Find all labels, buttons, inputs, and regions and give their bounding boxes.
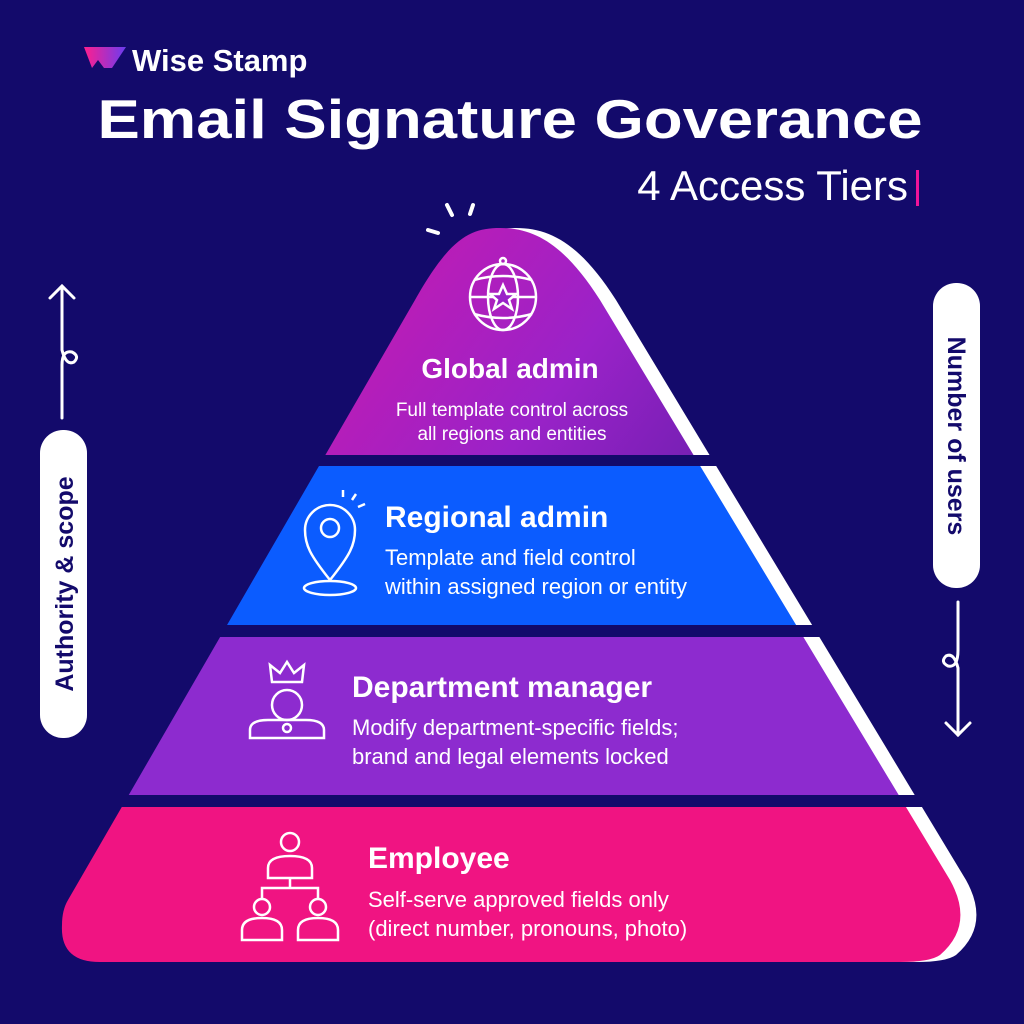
tier 1: global admin — [325, 228, 710, 455]
tier 4: employee — [62, 807, 976, 962]
arrow: down — [943, 602, 970, 735]
tier 4: employee: Self-serve approved fields only — [368, 887, 669, 912]
icon: map pin — [304, 490, 365, 595]
tier 3: department manager: brand and legal elements locked — [352, 744, 669, 769]
sparkle — [428, 205, 473, 233]
tier 3: department manager: Department manager — [352, 671, 652, 704]
icon: globe — [470, 258, 536, 330]
tier 3: department manager — [128, 637, 915, 795]
tier 1: global admin: Global admin — [421, 353, 599, 384]
tier 2: regional admin: Regional admin — [385, 501, 608, 534]
tier 4: employee: (direct number, pronouns, photo) — [368, 916, 687, 941]
icon: org chart — [242, 833, 338, 940]
tier 1: global admin: all regions and entities — [417, 424, 607, 445]
tier 3: department manager: Modify department-specific fields; — [352, 715, 678, 740]
tier 2: regional admin: Template and field control — [385, 545, 636, 570]
tier 4: employee: Employee — [368, 842, 510, 875]
pill: number of users — [933, 283, 980, 588]
title: Email Signature Goverance — [98, 88, 922, 150]
arrow: up — [50, 286, 77, 418]
tier 1: global admin: Full template control across — [396, 400, 628, 421]
subtitle: 4 Access Tiers — [637, 162, 908, 209]
pill: authority & scope — [40, 430, 87, 738]
pill: number of users: Number of users — [942, 337, 970, 535]
tier 2: regional admin: within assigned region or entity — [384, 574, 687, 599]
tier 2: regional admin — [227, 466, 812, 625]
icon: person with crown — [250, 662, 324, 738]
logo: Wise Stamp — [132, 43, 307, 78]
pill: authority & scope: Authority & scope — [51, 476, 79, 692]
